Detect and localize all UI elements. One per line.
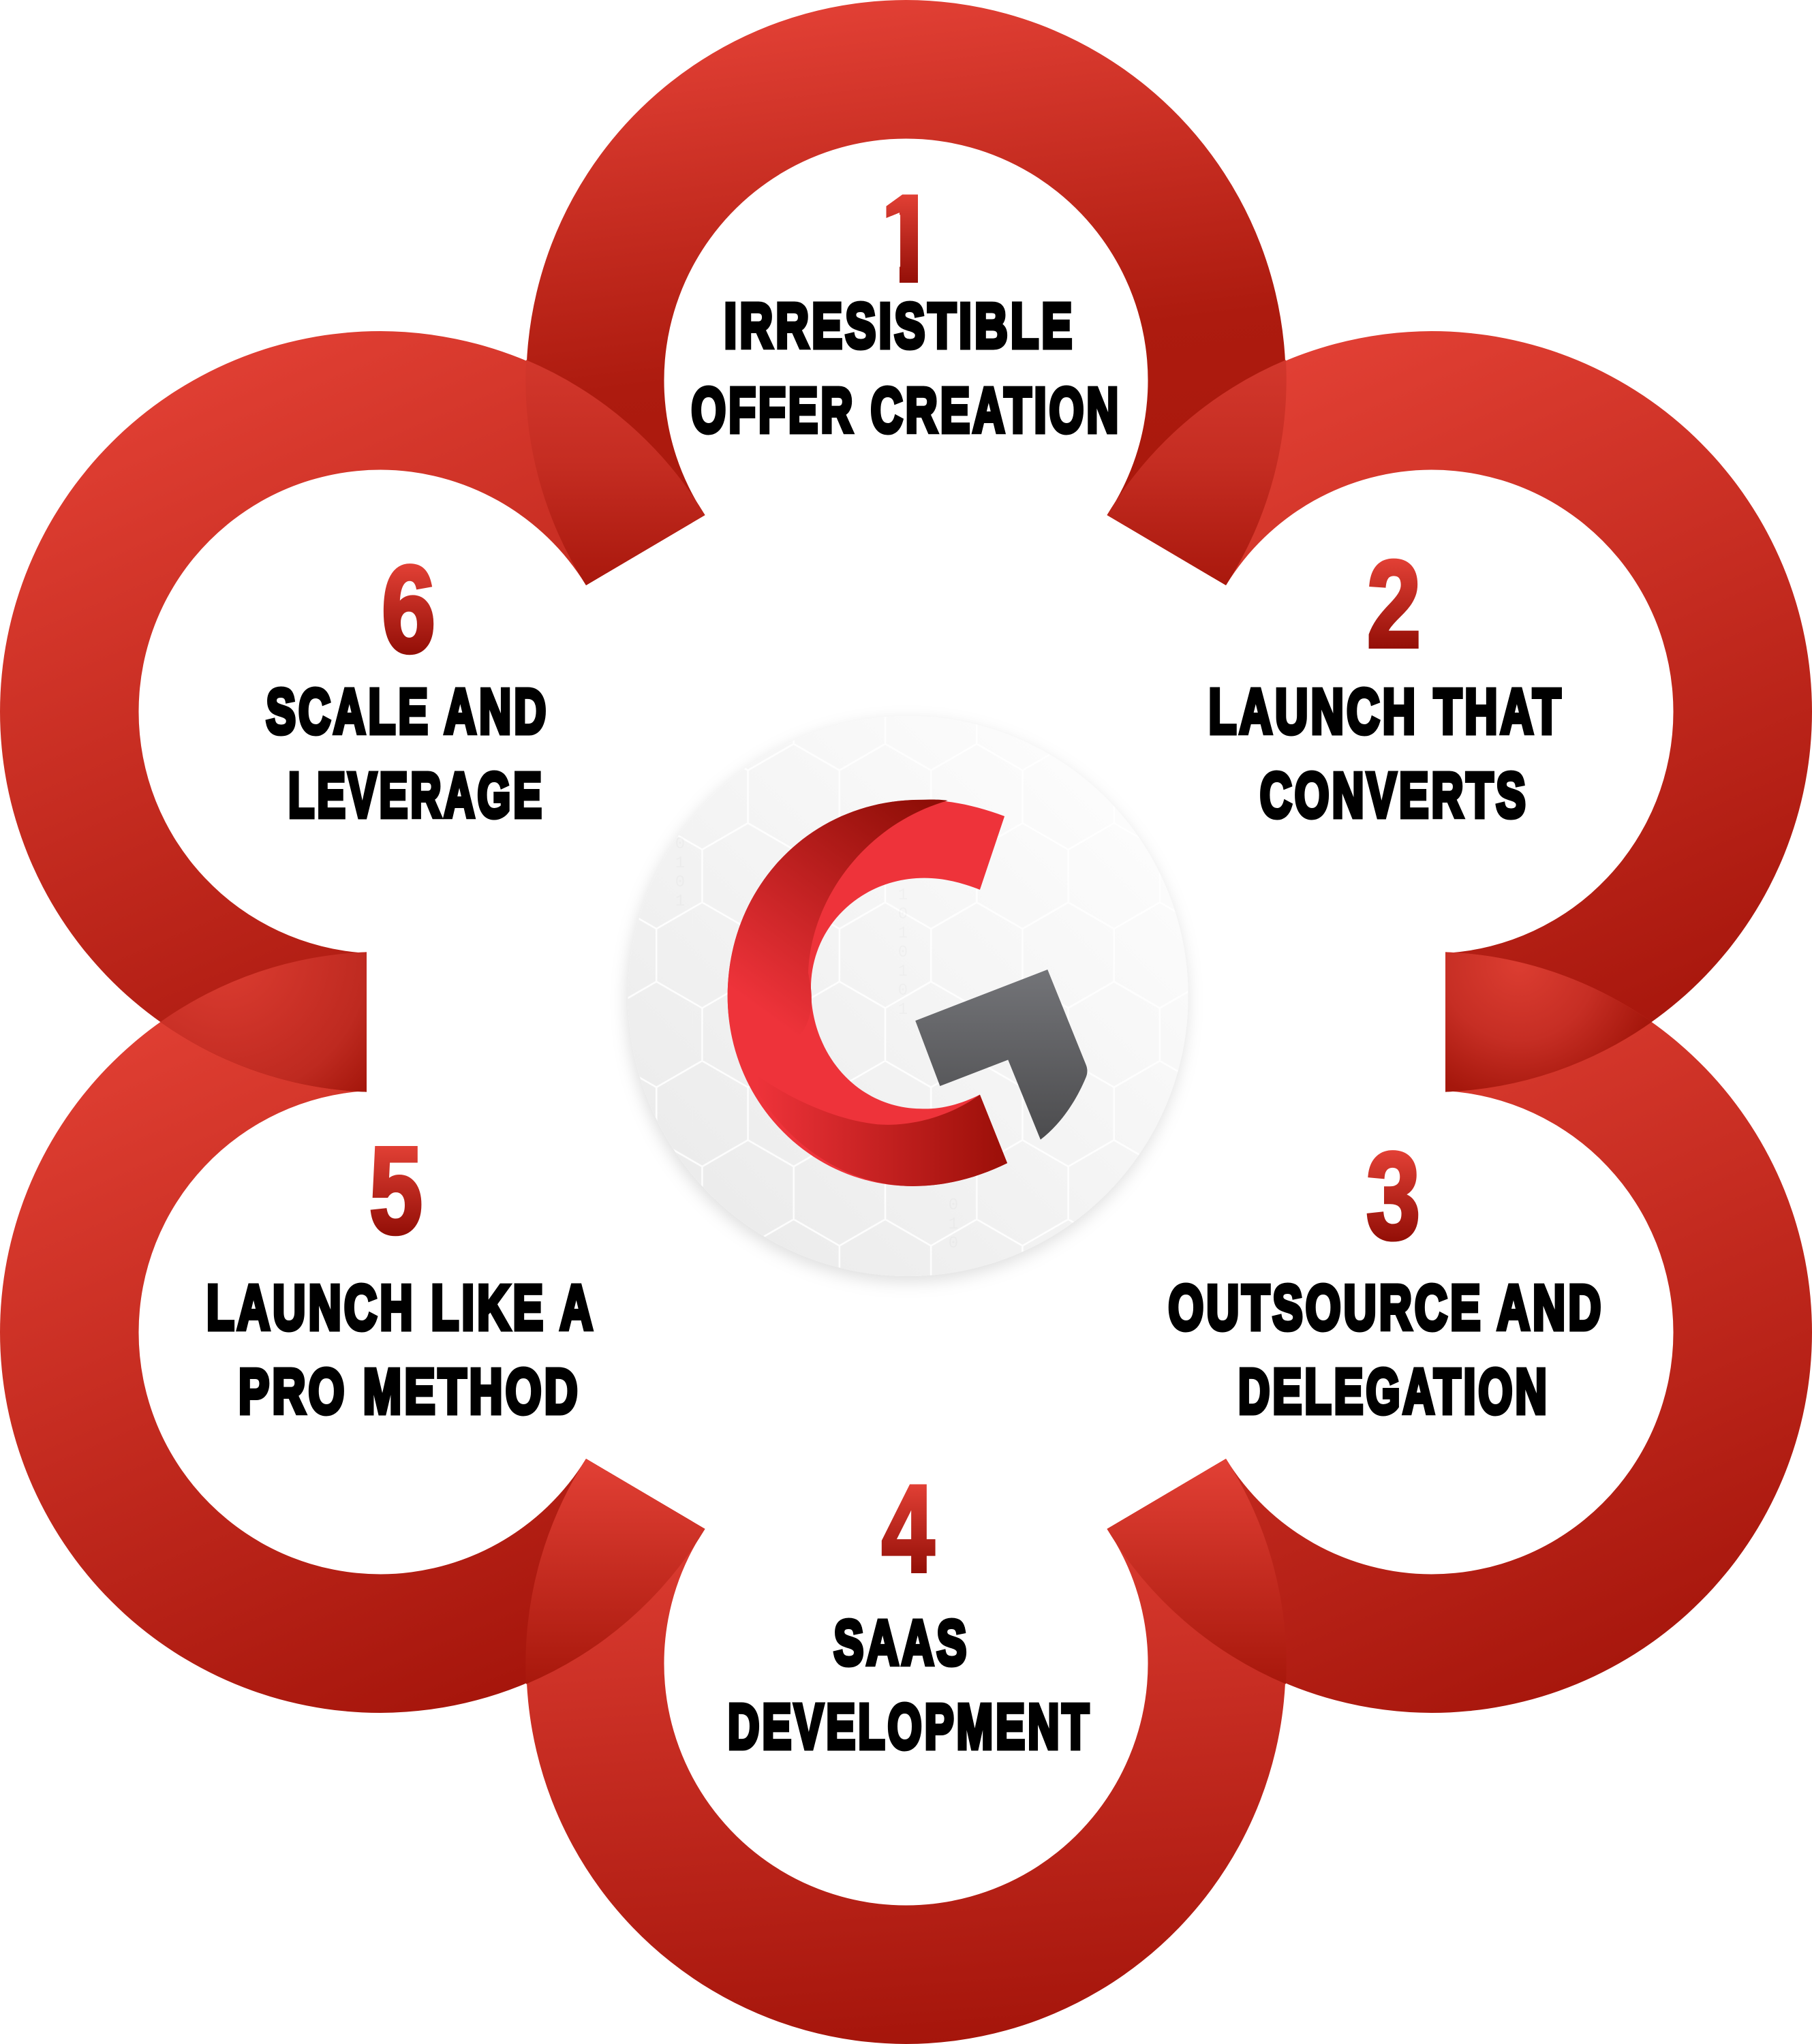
step 6 text: SCALE AND bbox=[266, 676, 549, 747]
step 1 text bbox=[691, 195, 1118, 435]
step 2 text bbox=[1209, 536, 1563, 831]
step 3 text: 3 bbox=[1366, 1127, 1420, 1265]
step 1 text: OFFER CREATION bbox=[691, 375, 1122, 446]
center logo emblem: 0 bbox=[949, 1235, 958, 1253]
step 2 text: CONVERTS bbox=[1260, 760, 1529, 831]
center logo emblem: 0 bbox=[675, 873, 685, 892]
ring 2: upper right bbox=[1107, 331, 1812, 1092]
center logo emblem: 1 bbox=[949, 1215, 958, 1234]
ring 3: lower right bbox=[1107, 952, 1812, 1713]
center logo emblem: 0 bbox=[675, 835, 685, 854]
overlap: rings 4 and 5 bbox=[525, 1459, 705, 1684]
center logo emblem: 1 bbox=[898, 1001, 908, 1019]
step 4 text: DEVELOPMENT bbox=[728, 1691, 1092, 1762]
step 5 text: PRO METHOD bbox=[239, 1356, 581, 1427]
center logo emblem: 0 bbox=[949, 1196, 958, 1215]
center logo emblem: 1 bbox=[898, 886, 908, 905]
step 5 text: LAUNCH LIKE A bbox=[206, 1272, 596, 1343]
ring 4: bottom bbox=[526, 1459, 1286, 2044]
center logo emblem: 0 bbox=[898, 982, 908, 1000]
step 3 text: OUTSOURCE AND bbox=[1168, 1272, 1604, 1343]
overlap: rings 5 and 6 bbox=[160, 952, 367, 1092]
center logo emblem: 1 bbox=[675, 893, 685, 911]
logo letter G bbox=[728, 800, 1087, 1186]
step 2 text: LAUNCH THAT bbox=[1209, 676, 1563, 747]
overlap: rings 2 and 3 bbox=[1445, 952, 1652, 1092]
center logo emblem: 0 bbox=[898, 905, 908, 924]
ring 1: top bbox=[526, 0, 1286, 585]
ring 5: lower left bbox=[0, 952, 705, 1713]
center logo emblem: 0 bbox=[898, 944, 908, 962]
step 6 text bbox=[266, 541, 549, 831]
step 1 text: 1 bbox=[876, 170, 938, 308]
step 3 text bbox=[1168, 1127, 1604, 1427]
step 4 text bbox=[728, 1460, 1092, 1762]
overlap: rings 3 and 4 bbox=[1107, 1459, 1287, 1684]
center logo emblem: 1 bbox=[898, 925, 908, 943]
step 3 text: DELEGATION bbox=[1238, 1356, 1550, 1427]
center logo emblem: 1 bbox=[675, 854, 685, 873]
step 2 text: 2 bbox=[1367, 536, 1421, 673]
step 4 text: 4 bbox=[882, 1460, 934, 1598]
ring 6: upper left bbox=[0, 331, 705, 1092]
step 6 text: 6 bbox=[382, 541, 435, 679]
step 4 text: SAAS bbox=[834, 1607, 969, 1678]
step 6 text: LEVERAGE bbox=[288, 760, 544, 831]
overlap: rings 1 and 2 bbox=[1107, 360, 1287, 585]
step 5 text bbox=[206, 1121, 596, 1427]
center logo emblem: 1 bbox=[898, 963, 908, 981]
step 5 text: 5 bbox=[369, 1121, 423, 1259]
center logo emblem bbox=[613, 702, 1206, 1288]
overlap: rings 6 and 1 bbox=[525, 360, 705, 585]
step 1 text: IRRESISTIBLE bbox=[724, 290, 1075, 361]
